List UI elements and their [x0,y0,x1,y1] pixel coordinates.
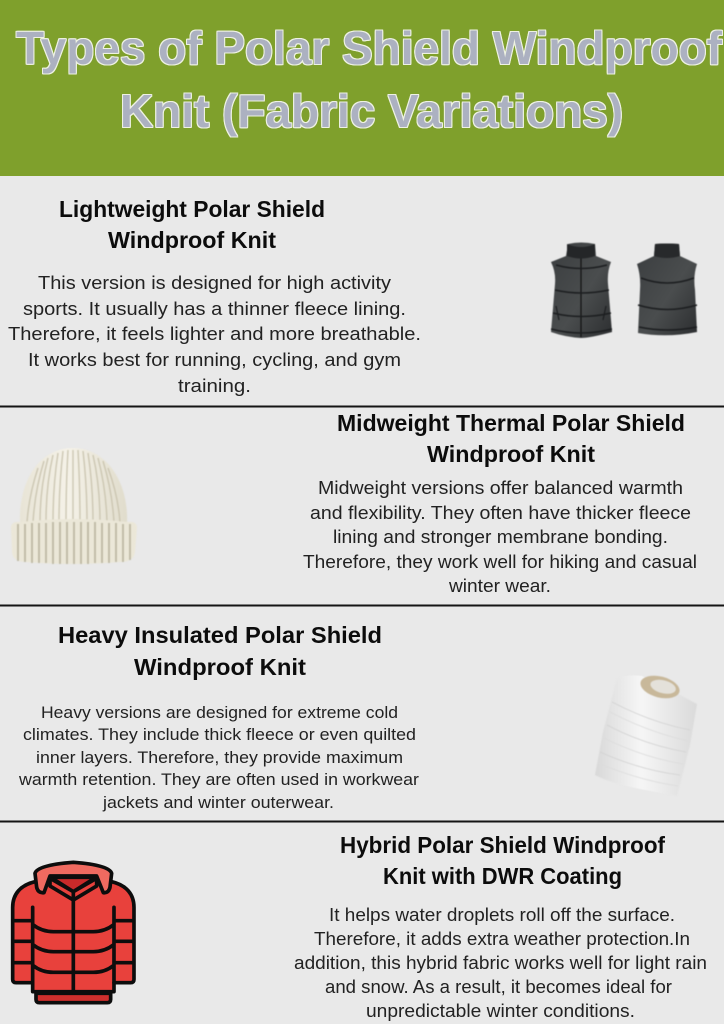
text block: midweight: and flexibility. They often have thicker fleece [310,502,691,523]
panel: lightweight [8,196,697,396]
text block: hybrid: addition, this hybrid fabric works well for light rain [294,952,707,973]
title banner [0,0,724,176]
icon: black puffer vests [551,242,697,338]
icon: red puffer jacket [13,862,134,1003]
text block: lightweight: training. [178,375,251,396]
panel: hybrid [13,832,707,1021]
text block: midweight [303,477,697,596]
text block: heavy: inner layers. Therefore, they provide maximum [36,748,403,767]
heading: hybrid [340,832,665,889]
text block: hybrid: Therefore, it adds extra weather protection.In [314,928,690,949]
panel: heavy [18,622,697,812]
text block: midweight: Midweight versions offer balanced warmth [318,477,683,498]
title [16,22,723,137]
heading: heavy: Windproof Knit [134,654,306,680]
divider [0,604,724,606]
heading: midweight [337,410,685,467]
heading: lightweight: Lightweight Polar Shield [59,196,325,222]
title: Types of Polar Shield Windproof [16,22,723,74]
text block: heavy: Heavy versions are designed for extreme cold [41,703,398,722]
title: Knit (Fabric Variations) [120,85,623,137]
text block: lightweight: It works best for running, cycling, and gym [28,349,401,370]
heading: hybrid: Hybrid Polar Shield Windproof [340,832,665,858]
heading: midweight: Windproof Knit [427,441,595,467]
text block: lightweight: sports. It usually has a thinner fleece lining. [23,298,406,319]
icon: knit beanie [11,448,137,564]
text block: hybrid [294,904,707,1021]
text block: hybrid: unpredictable winter conditions. [366,1000,635,1021]
divider [0,820,724,822]
heading: heavy: Heavy Insulated Polar Shield [58,622,382,648]
beanie cuff [11,519,137,564]
text block: heavy: climates. They include thick fleece or even quilted [23,725,416,744]
vest back [637,244,697,335]
text block: midweight: lining and stronger membrane bonding. [333,526,668,547]
heading: heavy [58,622,382,680]
heading: lightweight [59,196,325,253]
text block: heavy [18,703,419,812]
spool core [638,672,682,702]
icon: white yarn spool [595,672,697,796]
heading: midweight: Midweight Thermal Polar Shield [337,410,685,436]
text block: heavy: jackets and winter outerwear. [102,793,334,812]
divider [0,406,724,408]
text block: hybrid: It helps water droplets roll off the surface. [329,904,675,925]
text block: lightweight: This version is designed for high activity [38,272,392,293]
panel: midweight [11,410,697,596]
text block: midweight: Therefore, they work well for hiking and casual [303,551,697,572]
heading: lightweight: Windproof Knit [108,227,276,253]
text block: heavy: warmth retention. They are often used in workwear [18,770,419,789]
text block: lightweight [8,272,421,396]
heading: hybrid: Knit with DWR Coating [383,863,622,889]
text block: midweight: winter wear. [448,575,551,596]
text block: lightweight: Therefore, it feels lighter and more breathable. [8,323,421,344]
text block: hybrid: and snow. As a result, it becomes ideal for [325,976,672,997]
vest front [551,242,612,338]
